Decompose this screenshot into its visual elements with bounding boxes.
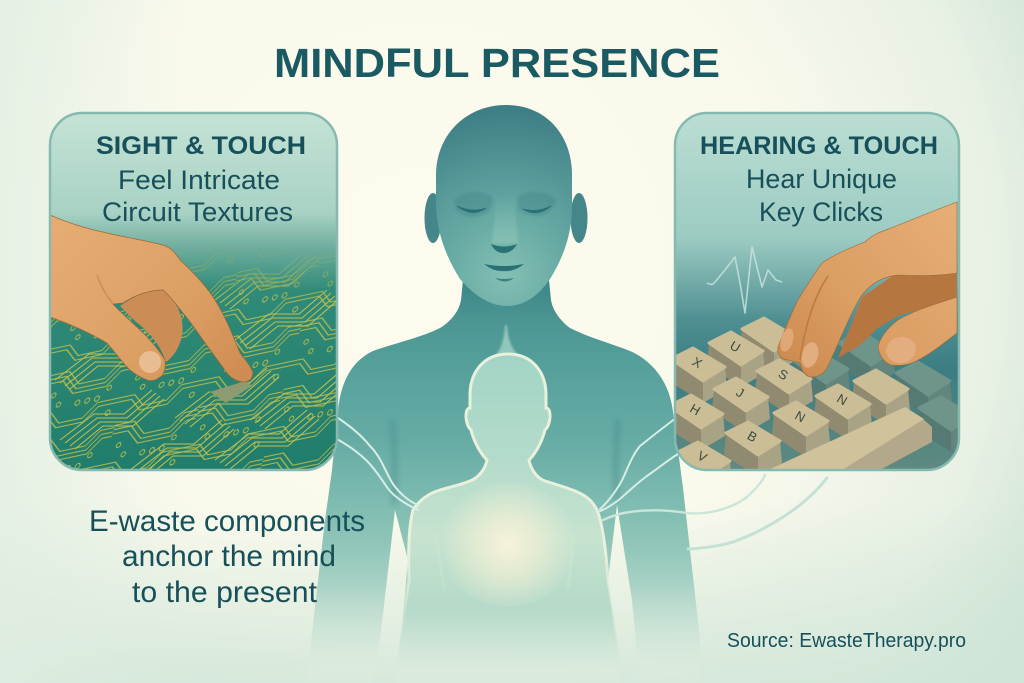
panel heading: SIGHT & TOUCH (96, 132, 306, 160)
keyboard (676, 316, 958, 469)
key letters (687, 338, 850, 465)
thumb nail (139, 351, 161, 373)
key letters: H (687, 401, 703, 418)
key letters: N (792, 408, 808, 425)
eye socket shading (454, 192, 556, 217)
head (436, 105, 572, 306)
panel: hearing and touch (674, 112, 960, 472)
finger nails (780, 328, 794, 352)
circuit traces (51, 250, 336, 469)
key letters: X (690, 354, 705, 371)
arm shading (392, 420, 618, 505)
title: MINDFUL PRESENCE (274, 40, 720, 86)
inner glowing figure (399, 352, 618, 651)
outer line arcs (603, 475, 827, 549)
source credit: Source: EwasteTherapy.pro (727, 630, 966, 652)
inner figure body (399, 352, 618, 651)
caption text block: anchor the mind (122, 540, 336, 573)
panel border (50, 113, 337, 470)
body silhouette (311, 280, 700, 647)
panel text line one: Hear Unique (746, 164, 897, 194)
hand touching circuit (50, 215, 253, 382)
caption text block: E-waste components (89, 505, 365, 538)
nose bridge highlight (492, 210, 518, 243)
key letters: J (734, 384, 747, 401)
thumb nail (886, 337, 916, 363)
panel text line two: Key Clicks (759, 197, 883, 227)
panel heading: HEARING & TOUCH (700, 132, 938, 160)
panel: sight and touch (50, 113, 354, 479)
spacebar (840, 418, 932, 470)
key letters: S (776, 366, 791, 383)
circuit board background (50, 113, 337, 470)
finger crease shadow (97, 275, 113, 304)
ears (424, 193, 588, 243)
face features (457, 206, 551, 282)
inner arm lines (442, 578, 570, 588)
key letters: V (695, 448, 710, 465)
energy stem (496, 325, 518, 355)
key letters: U (727, 338, 743, 355)
microchip (210, 381, 252, 403)
central meditating figure (305, 105, 702, 683)
key letters: B (745, 428, 760, 445)
heart glow (450, 485, 566, 604)
panel border (675, 113, 959, 470)
connecting energy lines (335, 418, 678, 511)
thumb (878, 297, 957, 365)
panel background (675, 113, 959, 470)
key letters: N (834, 391, 850, 408)
finger separation (800, 276, 828, 360)
caption text block (89, 505, 365, 609)
panel text line two: Circuit Textures (102, 197, 293, 227)
sound wave icon (707, 247, 782, 313)
caption text block: to the present (132, 576, 318, 609)
panel text line one: Feel Intricate (118, 165, 280, 195)
hand pressing keys (778, 202, 957, 377)
